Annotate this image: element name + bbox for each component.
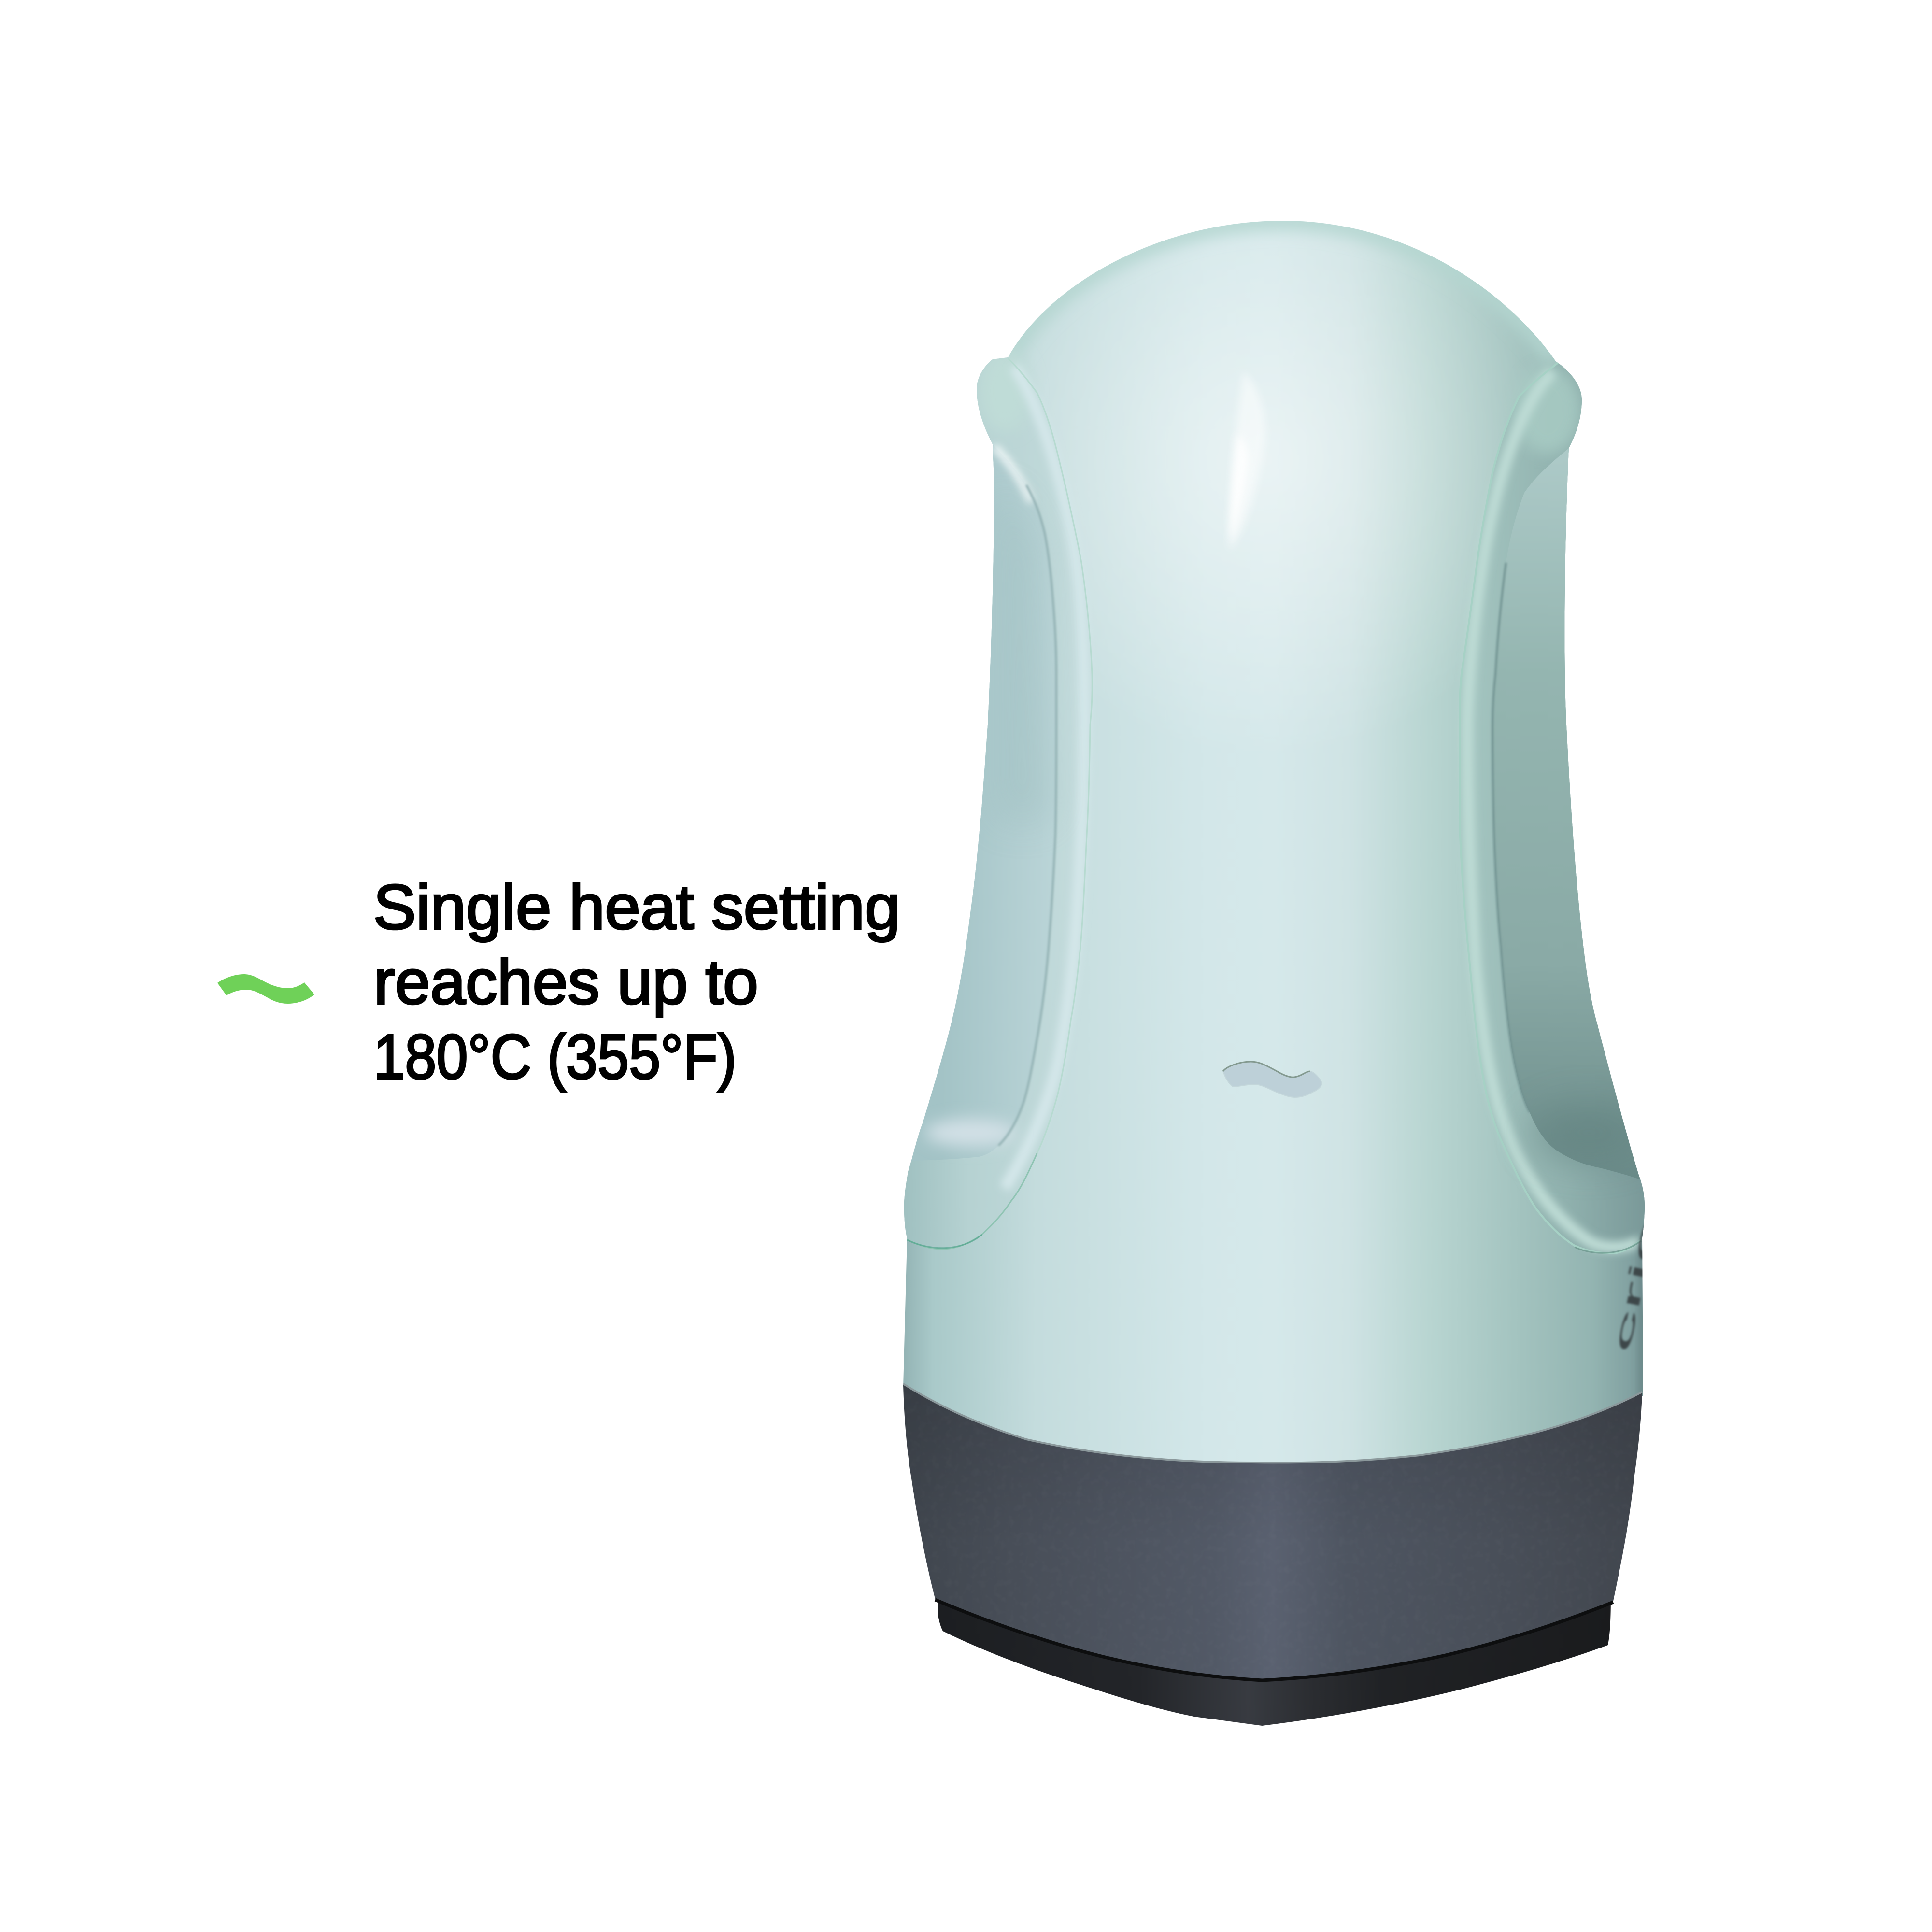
body lower seam right — [1575, 1241, 1641, 1253]
right band edge line — [1460, 362, 1641, 1253]
dome glow — [1057, 277, 1505, 640]
product: mini heat press iron — [903, 221, 1645, 1726]
left opening edge line — [998, 485, 1056, 1146]
soleplate gap line — [935, 1600, 1613, 1680]
icon: green heat wave — [217, 974, 314, 1004]
wave upper edge — [1223, 1062, 1310, 1077]
mint body shell — [903, 221, 1645, 1462]
callout text: heat setting — [373, 871, 900, 1092]
text line 3: 180°C (355°F) — [373, 1021, 737, 1092]
wave fill — [1223, 1062, 1322, 1097]
left band ridge highlight — [1005, 367, 1084, 1188]
right opening inner shadow — [1531, 1106, 1647, 1159]
infographic canvas — [217, 221, 1645, 1726]
right opening edge line — [1492, 563, 1530, 1112]
mint seam highlight — [903, 1384, 1642, 1463]
right band ridge highlight — [1467, 372, 1640, 1247]
text line 2: reaches up to — [374, 946, 758, 1017]
dome bright streak — [1230, 435, 1249, 541]
iron soleplate — [938, 1589, 1611, 1726]
body lower seam left — [907, 1235, 982, 1248]
left band lower edge line — [908, 1153, 1037, 1249]
dome rim shade — [1008, 221, 1556, 361]
left opening highlight at bottom — [925, 1119, 1017, 1146]
left grip band — [904, 357, 1072, 1241]
right wing highlight — [1514, 367, 1582, 454]
left band edge line — [1008, 358, 1092, 1153]
dome specular highlight — [1229, 372, 1265, 551]
heat indicator wave on body — [1223, 1062, 1322, 1097]
base top shading — [903, 1384, 1642, 1679]
brand logo: cricut — [1608, 1146, 1677, 1355]
right hand opening — [1492, 435, 1690, 1179]
right edge darkening — [1638, 1241, 1647, 1497]
left opening shine at top — [994, 447, 1031, 502]
iron dark base — [903, 1384, 1642, 1679]
left hand opening — [869, 435, 1056, 1161]
left opening shadow at top — [996, 483, 1051, 821]
text line 1: Single heat setting — [373, 871, 900, 942]
right grip band — [1460, 338, 1690, 1253]
base surface grain — [903, 1384, 1642, 1679]
left wing highlight — [990, 380, 993, 403]
